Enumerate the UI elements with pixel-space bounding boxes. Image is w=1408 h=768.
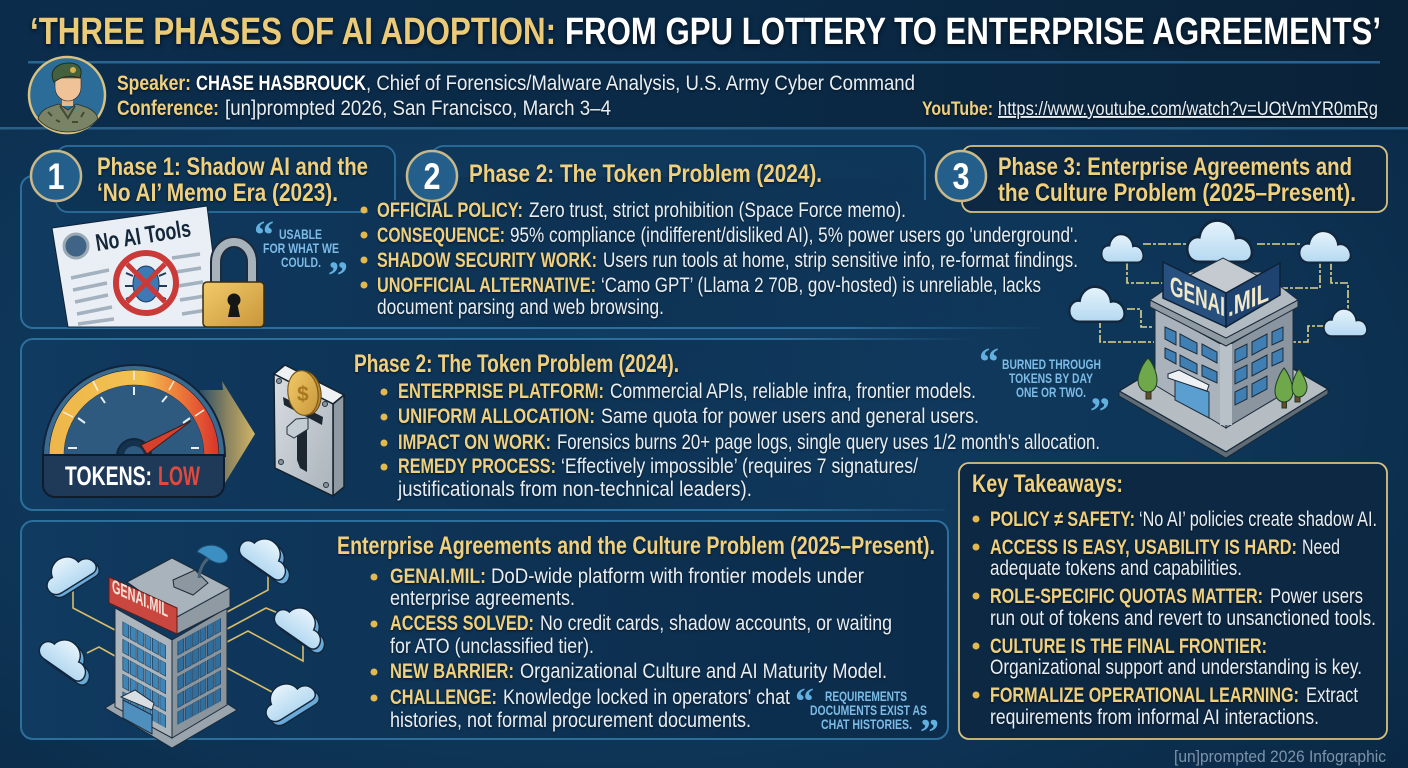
- tab: phase 1 heading: [31, 146, 395, 212]
- quote: usable: COULD.: [281, 254, 321, 270]
- takeaways list: FORMALIZE OPERATIONAL LEARNING:: [990, 684, 1299, 707]
- quote: requirements documents: “: [795, 681, 814, 723]
- bullets: phase 1: CONSEQUENCE:: [377, 224, 505, 247]
- bullets: phase 2: Forensics burns 20+ page logs, single query uses 1/2 month's allocation.: [557, 431, 1100, 454]
- bullets: phase 1: UNOFFICIAL ALTERNATIVE:: [377, 274, 596, 297]
- quote: requirements documents: DOCUMENTS EXIST AS: [810, 702, 927, 718]
- quote: burned through tokens: ONE OR TWO.: [1016, 384, 1086, 400]
- quote: usable: “: [254, 212, 274, 257]
- bullets: phase 1: 95% compliance (indifferent/disliked AI), 5% power users go 'underground'.: [510, 224, 1078, 247]
- icon: coin slot: $: [297, 383, 309, 406]
- header band: [0, 0, 1408, 130]
- tab: phase 2 heading: Phase 2: The Token Problem (2024).: [469, 160, 822, 188]
- bullets: phase 1: [360, 199, 1078, 319]
- tab: phase 1 heading: ‘No AI’ Memo Era (2023).: [97, 179, 338, 207]
- title: ‘THREE PHASES OF AI ADOPTION:: [30, 11, 556, 53]
- panel 3 heading: Enterprise Agreements and the Culture Problem (2025–Present).: [337, 532, 935, 560]
- tab: phase 1 heading: 1: [48, 156, 64, 197]
- icon: enterprise building with clouds: [36, 527, 336, 748]
- youtube link: YouTube:: [922, 99, 993, 120]
- quote: usable: USABLE: [279, 226, 322, 242]
- bullets: phase 2: [380, 380, 1100, 501]
- icon: GENAI.MIL building with clouds: [1069, 220, 1367, 458]
- icon: no AI tools memo: No AI Tools: [94, 215, 193, 257]
- tab: phase 2 heading: [407, 146, 925, 201]
- icon: speaker portrait: [29, 57, 105, 133]
- bullets: phase 1: document parsing and web browsing.: [377, 296, 664, 319]
- icon: GENAI.MIL building with clouds: .MIL: [1228, 276, 1269, 323]
- panel: phase 2: [21, 339, 1100, 510]
- icon: coin slot: [274, 365, 344, 496]
- icon: tokens low gauge: [43, 365, 255, 497]
- takeaways list: Power users: [1270, 585, 1363, 608]
- bullets: phase 2: UNIFORM ALLOCATION:: [398, 405, 595, 428]
- bullets: phase 1: Users run tools at home, strip sensitive info, re-format findings.: [603, 249, 1078, 272]
- icon: no AI tools memo: [52, 206, 222, 327]
- quote: burned through tokens: ”: [1090, 389, 1110, 434]
- takeaways list: [972, 508, 1377, 729]
- bullets: phase 3: GENAI.MIL:: [390, 565, 486, 588]
- icon: GENAI.MIL building with clouds: GENAI: [1170, 270, 1225, 322]
- takeaways heading: Key Takeaways:: [972, 470, 1123, 498]
- quote: requirements documents: ”: [920, 712, 939, 754]
- tab: phase 2 heading: 2: [424, 156, 440, 197]
- bullets: phase 3: for ATO (unclassified tier).: [390, 635, 594, 658]
- bullets: phase 2: justificationals from non-technical leaders).: [397, 478, 752, 501]
- bullets: phase 3: Knowledge locked in operators' chat: [503, 686, 790, 709]
- quote: requirements documents: REQUIREMENTS: [825, 688, 907, 704]
- speaker details: CHASE HASBROUCK: [196, 72, 366, 95]
- footer credit: [un]prompted 2026 Infographic: [1174, 747, 1386, 766]
- bullets: phase 3: enterprise agreements.: [390, 587, 575, 610]
- speaker details: , Chief of Forensics/Malware Analysis, U.S. Army Cyber Command: [366, 72, 915, 95]
- bullets: phase 3: No credit cards, shadow accounts, or waiting: [540, 612, 892, 635]
- bullets: phase 3: [370, 565, 892, 732]
- icon: tokens low gauge: LOW: [158, 461, 200, 491]
- quote: usable: [254, 212, 348, 298]
- quote: burned through tokens: [979, 339, 1110, 434]
- speaker details: [117, 72, 915, 95]
- takeaways list: Need: [1302, 536, 1340, 559]
- bullets: phase 1: SHADOW SECURITY WORK:: [377, 249, 597, 272]
- takeaways list: CULTURE IS THE FINAL FRONTIER:: [990, 635, 1267, 658]
- takeaways list: ROLE-SPECIFIC QUOTAS MATTER:: [990, 585, 1263, 608]
- takeaways list: ACCESS IS EASY, USABILITY IS HARD:: [990, 536, 1297, 559]
- bullets: phase 2: ‘Effectively impossible’ (requires 7 signatures/: [561, 455, 918, 478]
- tab: phase 3 heading: [936, 146, 1387, 212]
- panel 2 heading: Phase 2: The Token Problem (2024).: [354, 350, 679, 378]
- takeaways list: POLICY ≠ SAFETY:: [990, 508, 1135, 531]
- icon: tokens low gauge: TOKENS:: [65, 461, 152, 491]
- quote: burned through tokens: BURNED THROUGH: [1002, 356, 1101, 372]
- quote: burned through tokens: TOKENS BY DAY: [1009, 370, 1093, 386]
- quote: requirements documents: CHAT HISTORIES.: [821, 716, 912, 732]
- panel: phase 3: [21, 521, 948, 754]
- tab: phase 3 heading: 3: [952, 156, 970, 197]
- bullets: phase 2: ENTERPRISE PLATFORM:: [398, 380, 604, 403]
- bullets: phase 2: Same quota for power users and general users.: [601, 405, 979, 428]
- icon: enterprise building with clouds: GENAI.MIL: [112, 576, 168, 622]
- bullets: phase 2: Commercial APIs, reliable infra, frontier models.: [610, 380, 976, 403]
- bullets: phase 2: REMEDY PROCESS:: [398, 455, 556, 478]
- quote: requirements documents: [795, 681, 939, 754]
- bullets: phase 1: Zero trust, strict prohibition (Space Force memo).: [529, 199, 906, 222]
- conference details: [un]prompted 2026, San Francisco, March 3–4: [225, 97, 611, 120]
- quote: usable: FOR WHAT WE: [263, 240, 339, 256]
- takeaways list: requirements from informal AI interactions.: [990, 706, 1319, 729]
- speaker details: Speaker:: [117, 72, 191, 95]
- bullets: phase 3: CHALLENGE:: [390, 686, 497, 709]
- icon: padlock: [203, 242, 264, 327]
- bullets: phase 3: Organizational Culture and AI Maturity Model.: [520, 660, 887, 683]
- bullets: phase 3: histories, not formal procurement documents.: [390, 709, 751, 732]
- quote: usable: ”: [328, 253, 348, 298]
- tab: phase 1 heading: Phase 1: Shadow AI and the: [97, 153, 368, 181]
- bullets: phase 3: NEW BARRIER:: [390, 660, 514, 683]
- panel: key takeaways: [959, 463, 1387, 739]
- panel: phase 1: [21, 146, 1078, 328]
- takeaways list: adequate tokens and capabilities.: [990, 557, 1242, 580]
- quote: burned through tokens: “: [979, 339, 999, 384]
- conference details: Conference:: [117, 97, 219, 120]
- title: [30, 11, 1381, 53]
- bullets: phase 1: ‘Camo GPT’ (Llama 2 70B, gov-hosted) is unreliable, lacks: [601, 274, 1041, 297]
- bullets: phase 3: DoD-wide platform with frontier models under: [491, 565, 864, 588]
- bullets: phase 2: IMPACT ON WORK:: [398, 431, 551, 454]
- bullets: phase 3: ACCESS SOLVED:: [390, 612, 534, 635]
- takeaways list: Extract: [1306, 684, 1358, 707]
- bullets: phase 1: OFFICIAL POLICY:: [377, 199, 523, 222]
